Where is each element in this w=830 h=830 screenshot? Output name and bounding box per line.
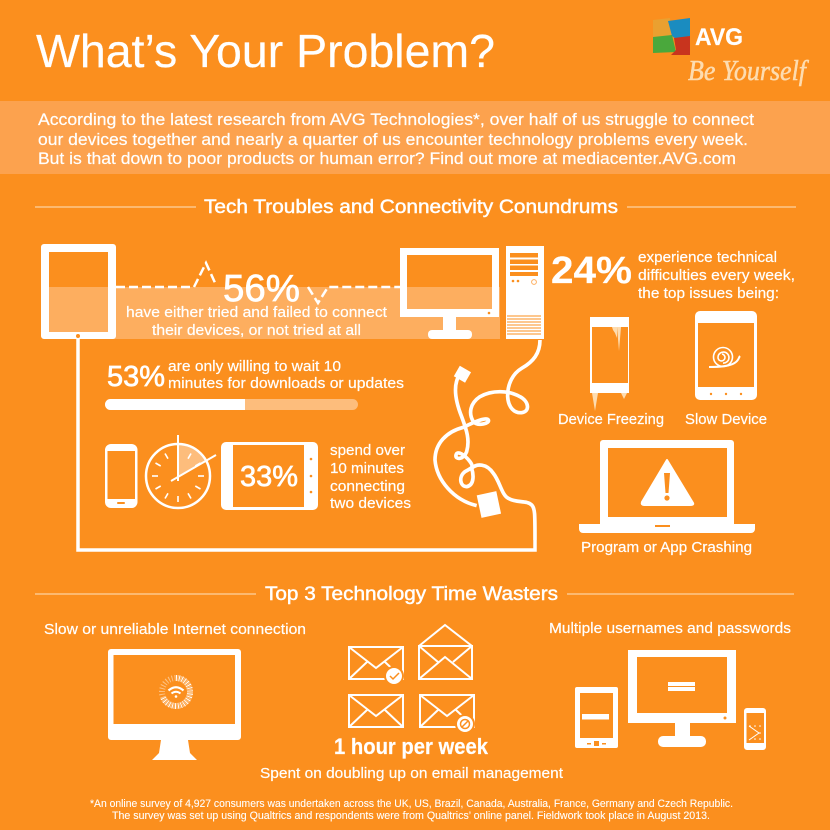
cables [78,339,540,550]
stat: 53%: 53% [107,361,165,393]
label: 1 hour per week: 1 hour per week [334,734,489,759]
icon: slow tablet with snail [695,311,757,400]
intro band: According to the latest research from AVG Technologies*, over half of us struggle to connect [38,110,754,129]
section heading: tech troubles: Tech Troubles and Connectivity Conundrums [204,197,618,218]
stat: 24%: the top issues being: [638,285,779,302]
label: email management: Spent on doubling up on email management [260,765,564,782]
footnote: *An online survey of 4,927 consumers was undertaken across the UK, US, Brazil, Canada, Australia, France, Germany and Czech Republic. [90,798,733,810]
footnote: The survey was set up using Qualtrics and respondents were from Qualtrics’ online panel. Fieldwork took place in August 2013. [112,810,710,822]
label: slow internet: Slow or unreliable Internet connection [44,621,306,638]
dashed connection arrow [116,263,400,303]
stat: 56% [126,268,388,339]
stat: 56%: 56% [223,268,300,310]
icon: emails [349,625,474,733]
icon: desktop monitor [400,248,499,339]
icon: landscape tablet with 33% [221,442,318,510]
label: program or app crashing: Program or App Crashing [581,539,752,556]
intro band: But is that down to poor products or human error? Find out more at mediacenter.AVG.com [38,149,736,168]
icon: laptop with warning [579,440,755,533]
label: usernames and passwords: Multiple usernames and passwords [549,620,791,637]
icon: smartphone [105,444,138,508]
title: What’s Your Problem? [36,25,495,77]
icon: devices with login fields [575,650,766,750]
icon: computer tower [506,246,544,339]
stat: 56%: their devices, or not tried at all [152,322,361,339]
light connection band [49,287,500,339]
footnote [90,798,733,822]
AVG logo [653,18,810,87]
stat: 53%: minutes for downloads or updates [168,375,404,392]
icon: freezing phone [590,317,629,411]
stat: 24%: experience technical [638,249,777,266]
intro band: our devices together and nearly a quarter of us encounter technology problems every week. [38,130,748,149]
intro band [0,101,830,174]
icon: monitor with wifi loader [108,649,241,760]
AVG logo: AVG [695,24,743,51]
icon: tablet [41,244,116,339]
stat: 24%: 24% [551,250,632,292]
text: spend over 10 minutes: two devices [330,495,411,512]
label: slow device: Slow Device [685,411,767,428]
text: spend over 10 minutes: spend over [330,442,405,459]
text: spend over 10 minutes: 10 minutes [330,460,404,477]
AVG logo: Be Yourself [688,55,810,87]
text: spend over 10 minutes: connecting [330,478,405,495]
progress bar: 53% [105,399,358,410]
section heading: time wasters: Top 3 Technology Time Wasters [265,584,558,605]
stat: 24% [551,249,795,302]
stat: 53% [107,358,404,393]
icon: landscape tablet with 33%: 33% [240,461,298,493]
icon: clock [146,435,216,508]
stat: 56%: have either tried and failed to connect [126,304,388,321]
text: spend over 10 minutes [330,442,411,512]
label: device freezing: Device Freezing [558,411,664,428]
stat: 53%: are only willing to wait 10 [168,358,341,375]
stat: 24%: difficulties every week, [638,267,795,284]
